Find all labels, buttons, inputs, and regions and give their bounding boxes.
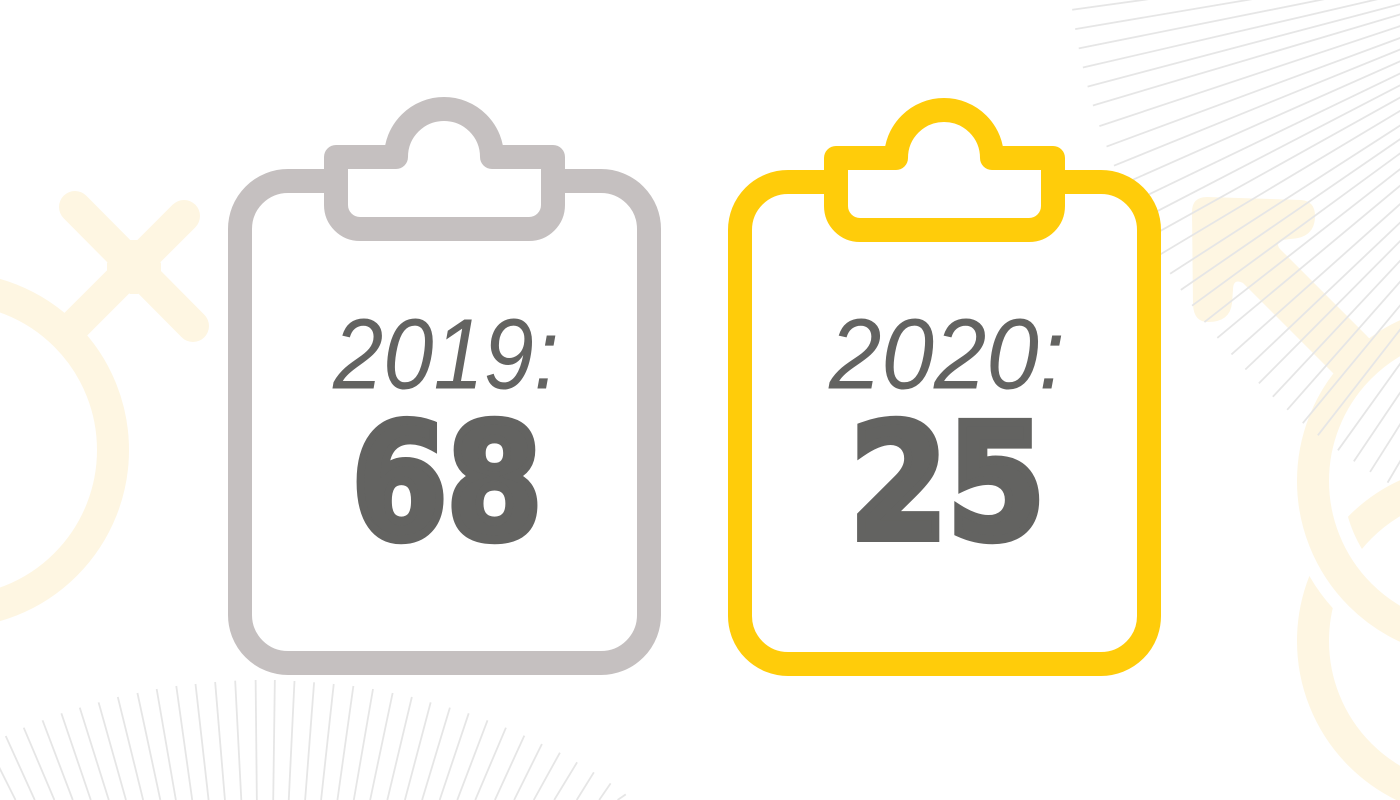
icon: yellow clipboard: [740, 110, 1149, 664]
background pattern: radial lines bottom left: [0, 680, 626, 800]
background pattern: radial lines top right: [1072, 0, 1400, 483]
background icon: female symbol: [0, 207, 193, 612]
panel: 2020 clipboard: [740, 110, 1149, 664]
value 68: 68: [352, 392, 542, 576]
background icon: lower male ring: [1313, 320, 1400, 800]
year label 2020: 2020:: [828, 298, 1065, 410]
background icon: male symbol with arrow: [1192, 197, 1400, 642]
value 25: 25: [850, 392, 1045, 576]
year label 2019: 2019:: [332, 298, 559, 410]
panel: 2019 clipboard: [240, 109, 649, 663]
icon: grey clipboard: [240, 109, 649, 663]
